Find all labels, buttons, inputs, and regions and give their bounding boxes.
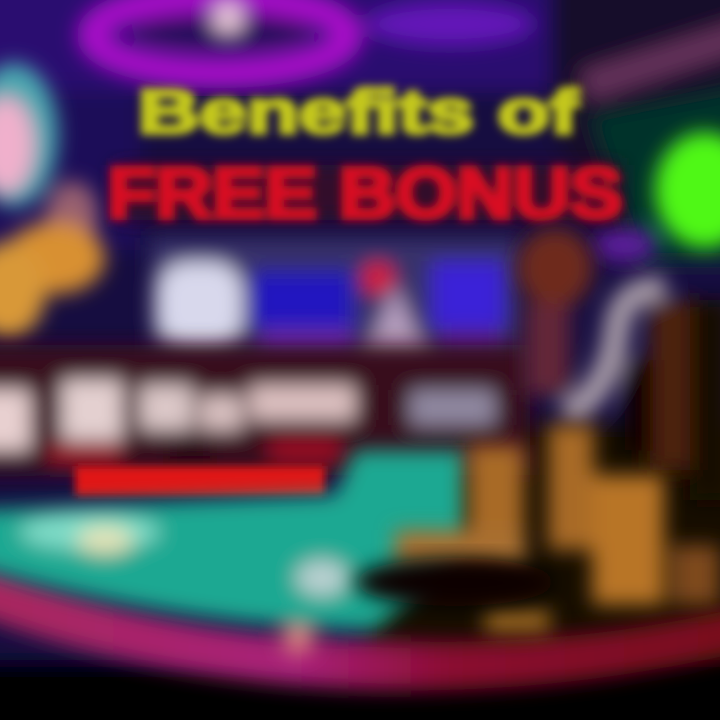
- chip stacks: [395, 425, 720, 632]
- left character: pink and orange figure: [0, 63, 105, 338]
- title: [108, 78, 622, 234]
- red table edge: [75, 466, 325, 496]
- red title backing: [115, 165, 620, 220]
- right character: brown figure and smoke: [517, 228, 720, 500]
- teal felt table: [0, 450, 465, 654]
- right green glow: [593, 132, 720, 263]
- title: FREE BONUS: [108, 154, 622, 234]
- table rim: [0, 562, 720, 690]
- dark tray: [355, 558, 555, 606]
- title: Benefits of: [138, 78, 578, 147]
- ceiling ring light: [92, 0, 535, 73]
- slot machines: [150, 238, 520, 368]
- row of seats: [0, 345, 530, 475]
